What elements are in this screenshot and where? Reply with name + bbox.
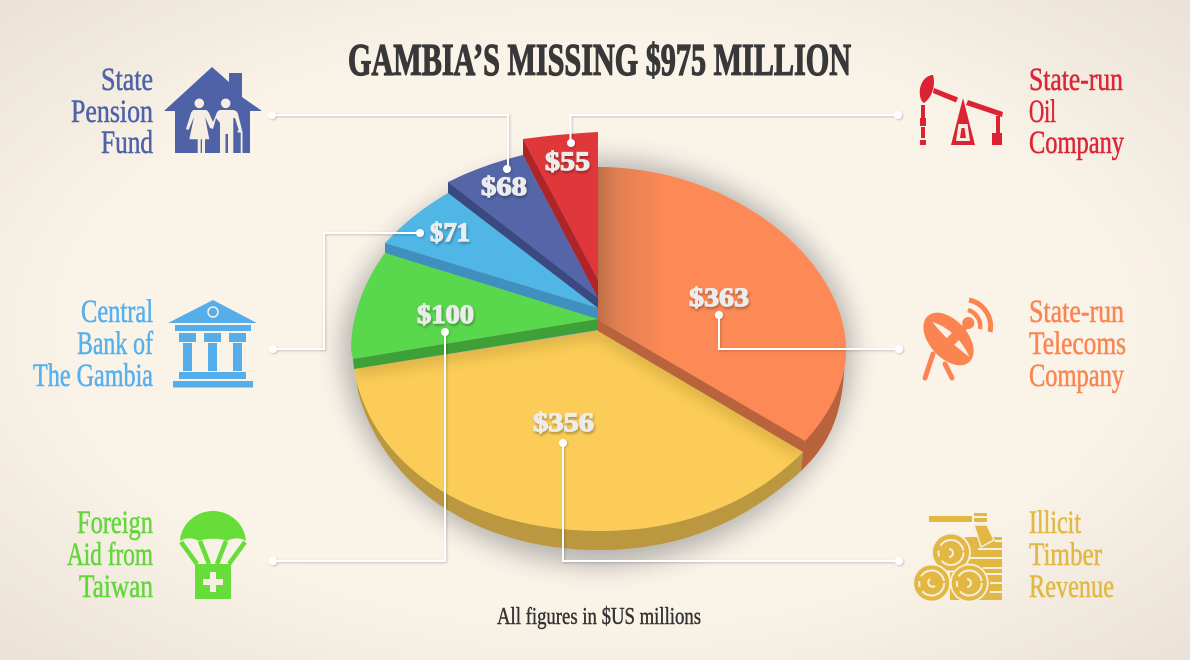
icon: bank building [168, 300, 257, 388]
icon: satellite dish [914, 300, 991, 378]
slice: state pension fund [448, 155, 598, 298]
label: state-run oil company: Company [1029, 125, 1124, 161]
green slice edge [353, 319, 598, 369]
icon: house with elderly couple [164, 67, 262, 153]
slice: central bank [385, 193, 598, 308]
pie chart [342, 132, 852, 566]
label: central bank [33, 294, 153, 394]
pie drop shadow [342, 160, 852, 566]
label: state pension fund: State [101, 62, 153, 98]
label: illicit timber revenue: Revenue [1029, 569, 1114, 605]
label: foreign aid: Taiwan [79, 569, 153, 605]
label: foreign aid [67, 505, 153, 605]
footnote: All figures in $US millions [497, 604, 701, 630]
label: central bank: Bank of [77, 326, 153, 362]
label: state-run oil company [1029, 62, 1124, 161]
label: state-run telecoms company: Telecoms [1029, 326, 1126, 362]
value labels [417, 147, 749, 437]
connector lines [268, 111, 903, 565]
label: foreign aid: Foreign [77, 505, 153, 541]
label: state-run telecoms company [1029, 294, 1126, 394]
value labels: $100 [417, 300, 474, 329]
slice side: orange rim [801, 350, 846, 471]
label: illicit timber revenue: Timber [1029, 537, 1102, 573]
label: illicit timber revenue [1029, 505, 1114, 605]
label: central bank: The Gambia [33, 358, 153, 394]
label: state-run telecoms company: State-run [1029, 294, 1124, 330]
value labels: $55 [545, 147, 590, 176]
icon: timber logs [913, 513, 1002, 602]
label: state-run oil company: State-run [1029, 62, 1123, 98]
label: illicit timber revenue: Illicit [1029, 505, 1081, 541]
icon: parachute with aid box [180, 511, 246, 599]
value labels: $71 [430, 218, 470, 247]
orange slice edge [598, 320, 805, 452]
label: state pension fund [71, 62, 153, 161]
title: GAMBIA’S MISSING $975 MILLION [348, 35, 851, 85]
slice: state-run oil company [523, 132, 598, 280]
light blue slice edge [385, 243, 598, 319]
value labels: $68 [481, 172, 527, 201]
label: state pension fund: Fund [101, 125, 153, 161]
slice: state-run telecoms company [598, 167, 846, 441]
icon: oil pump [920, 75, 1003, 145]
value labels: $356 [533, 408, 594, 437]
label: foreign aid: Aid from [67, 537, 153, 573]
yellow slice inner shade [354, 331, 803, 452]
label: state-run oil company: Oil [1029, 94, 1056, 130]
label: state-run telecoms company: Company [1029, 358, 1124, 394]
value labels: $363 [689, 283, 749, 312]
label: central bank: Central [81, 294, 153, 330]
dark blue slice edge [448, 182, 598, 308]
red slice edge [523, 139, 598, 298]
label: state pension fund: Pension [71, 94, 153, 130]
slice side: yellow rim [355, 369, 803, 550]
slice: foreign aid [351, 253, 598, 359]
slice: illicit timber revenue [354, 331, 803, 531]
